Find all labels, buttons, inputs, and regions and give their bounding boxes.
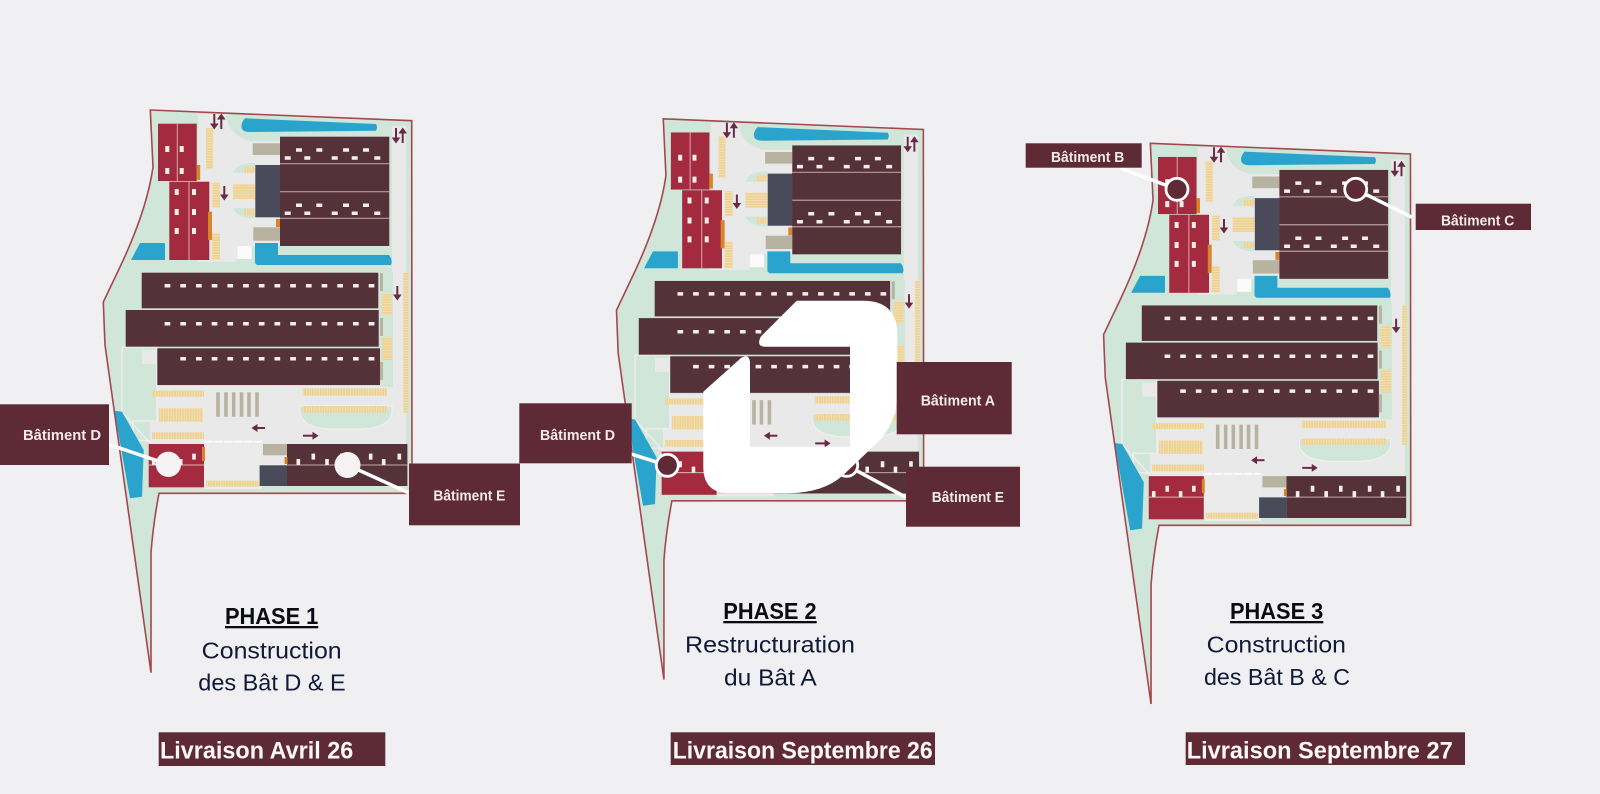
text: construction des Bât D & E bbox=[198, 637, 346, 696]
text: construction des Bât B & C bbox=[1204, 631, 1350, 690]
site plan: phase 3 bbox=[1104, 143, 1411, 704]
marker: Bâtiment E bbox=[836, 454, 858, 476]
logo watermark bbox=[703, 301, 897, 493]
text: construction des Bât B & C: des Bât B & C bbox=[1204, 664, 1350, 690]
leader line: Bâtiment D bbox=[109, 444, 168, 464]
label: Bâtiment D: Bâtiment D bbox=[23, 428, 101, 444]
marker: Bâtiment D bbox=[156, 452, 181, 477]
marker: Bâtiment D bbox=[656, 454, 678, 476]
label: Bâtiment D: Bâtiment D bbox=[540, 428, 615, 444]
panel: phase 2 bbox=[519, 119, 1020, 765]
marker: Bâtiment B bbox=[1166, 178, 1188, 200]
panel: phase 1 bbox=[0, 110, 520, 766]
label: Bâtiment C bbox=[1416, 204, 1531, 230]
delivery banner: phase 1: Livraison Avril 26 bbox=[160, 737, 353, 764]
label: Bâtiment A: Bâtiment A bbox=[921, 393, 996, 409]
label: Bâtiment A bbox=[897, 362, 1012, 434]
label: Bâtiment D bbox=[0, 404, 109, 465]
leader line: Bâtiment E bbox=[348, 465, 409, 493]
leader line: Bâtiment E bbox=[847, 465, 906, 497]
label: Bâtiment C: Bâtiment C bbox=[1441, 213, 1515, 229]
text: restructuration du Bât A bbox=[685, 631, 855, 691]
heading: phase 1: PHASE 1 bbox=[225, 603, 318, 629]
marker: Bâtiment E bbox=[334, 452, 360, 478]
text: construction des Bât D & E: des Bât D & E bbox=[198, 670, 346, 696]
panel: phase 3 bbox=[1026, 143, 1531, 765]
heading: phase 3: PHASE 3 bbox=[1230, 598, 1323, 624]
label: Bâtiment B bbox=[1026, 143, 1142, 168]
site plan: phase 1 bbox=[103, 110, 412, 673]
site plan: phase 2 bbox=[616, 119, 924, 680]
leader line: Bâtiment D bbox=[631, 454, 667, 465]
text: construction des Bât B & C: Construction bbox=[1207, 631, 1346, 657]
label: Bâtiment D bbox=[519, 403, 632, 463]
label: Bâtiment E bbox=[409, 464, 520, 525]
text: restructuration du Bât A: du Bât A bbox=[724, 665, 817, 691]
marker: Bâtiment C bbox=[1345, 178, 1367, 200]
leader line: Bâtiment B bbox=[1120, 168, 1177, 189]
heading: phase 2: PHASE 2 bbox=[723, 598, 817, 624]
label: Bâtiment E: Bâtiment E bbox=[932, 490, 1004, 506]
text: restructuration du Bât A: Restructuration bbox=[685, 631, 855, 657]
label: Bâtiment E: Bâtiment E bbox=[433, 488, 506, 504]
label: Bâtiment E bbox=[906, 467, 1020, 527]
delivery banner: phase 3: Livraison Septembre 27 bbox=[1187, 737, 1453, 764]
text: construction des Bât D & E: Construction bbox=[202, 637, 342, 663]
delivery banner: phase 2: Livraison Septembre 26 bbox=[673, 737, 933, 764]
leader line: Bâtiment C bbox=[1356, 189, 1412, 217]
label: Bâtiment B: Bâtiment B bbox=[1051, 150, 1124, 166]
